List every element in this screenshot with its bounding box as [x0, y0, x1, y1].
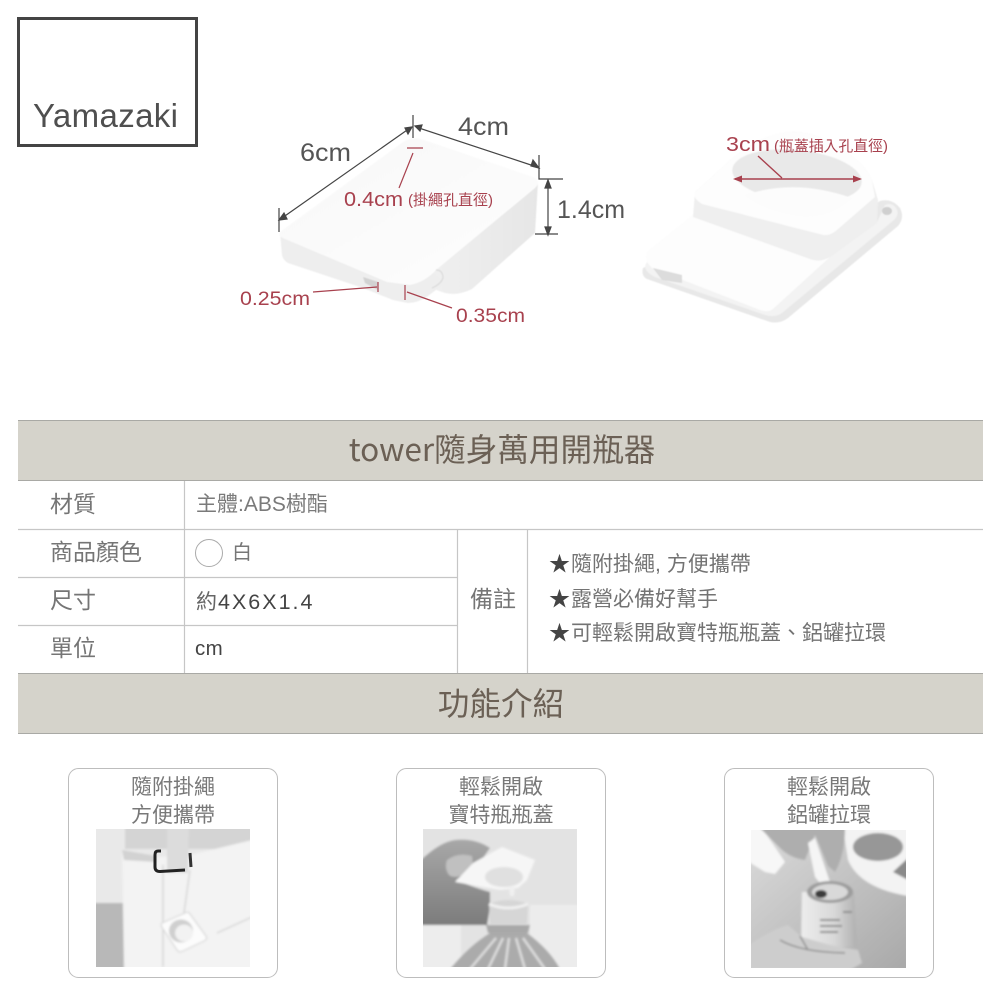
red annotation: 3cm cap diameter: (瓶蓋插入孔直徑) [774, 138, 888, 155]
dimension lines [279, 115, 563, 235]
caption: 隨附掛繩 [131, 776, 215, 799]
notes list: ★ [549, 622, 570, 645]
row: 尺寸 [50, 587, 314, 614]
card: opening can tab [724, 768, 934, 978]
product diagram: closed opener with dimensions [240, 113, 625, 327]
red annotation: hole diameter: 0.4cm [344, 188, 403, 211]
caption: 鋁罐拉環 [787, 804, 871, 827]
row: 尺寸: 約 [196, 591, 217, 614]
caption: 輕鬆開啟 [459, 776, 543, 799]
red annotation: hole diameter: (掛繩孔直徑) [408, 192, 493, 209]
card: carrying strap [68, 768, 278, 978]
red annotation: 0.35cm: 0.35cm [456, 305, 525, 327]
red annotation: hole diameter [344, 148, 493, 211]
product diagram: opener underside with bottle-cap hole [642, 132, 902, 322]
caption: 寶特瓶瓶蓋 [448, 804, 554, 827]
caption: 方便攜帶 [131, 804, 215, 827]
section band: 功能介紹 [18, 673, 983, 734]
caption [448, 776, 554, 827]
photo: can [749, 828, 908, 970]
caption [787, 776, 871, 827]
photo: bag with opener [94, 827, 252, 969]
notes list: 隨附掛繩, [571, 553, 661, 576]
notes list: ★ [549, 588, 570, 611]
notes list: ★ [549, 553, 570, 576]
red annotation: 0.35cm [405, 285, 525, 327]
row: 材質 [50, 491, 328, 517]
label 1.4cm: 1.4cm [557, 196, 625, 224]
label 6cm: 6cm [300, 139, 351, 167]
row: 尺寸: 4X6X1.4 [218, 590, 314, 614]
caption [131, 776, 215, 827]
red annotation: 0.25cm: 0.25cm [240, 288, 310, 310]
photo: bottle cap [421, 827, 579, 969]
row: 商品顏色: 白 [232, 541, 252, 564]
logo: Yamazaki: Yamazaki [33, 97, 178, 134]
table grid [18, 481, 983, 673]
table header band: tower隨身萬用開瓶器 [349, 425, 655, 471]
label 4cm: 4cm [458, 113, 509, 141]
row: 商品顏色: 商品顏色 [50, 539, 142, 565]
caption: 輕鬆開啟 [787, 776, 871, 799]
notes list: 露營必備好幫手 [571, 588, 718, 611]
row: 單位 [50, 635, 223, 661]
row: 尺寸: 尺寸 [50, 587, 96, 613]
notes label: 備註 [470, 586, 516, 612]
card: opening bottle cap [396, 768, 606, 978]
red annotation: 3cm cap diameter: 3cm [726, 134, 770, 156]
row: 單位: cm [195, 637, 223, 660]
table header band [18, 420, 983, 480]
row: 材質: 材質 [50, 491, 96, 517]
opener body closed [279, 138, 538, 303]
row: 單位: 單位 [50, 635, 96, 661]
logo: Yamazaki [18, 18, 196, 146]
row: 材質: 主體:ABS樹酯 [196, 493, 328, 516]
notes list [549, 553, 886, 645]
notes list: 方便攜帶 [667, 553, 751, 576]
red annotation: 0.25cm [240, 282, 378, 310]
spec table [18, 420, 983, 673]
row: 商品顏色 [50, 539, 252, 566]
notes list: 可輕鬆開啟寶特瓶瓶蓋、鋁罐拉環 [571, 622, 886, 645]
section band: 功能介紹: 功能介紹 [438, 679, 564, 725]
opener body open [642, 132, 902, 322]
red annotation: 3cm cap diameter [726, 134, 888, 182]
